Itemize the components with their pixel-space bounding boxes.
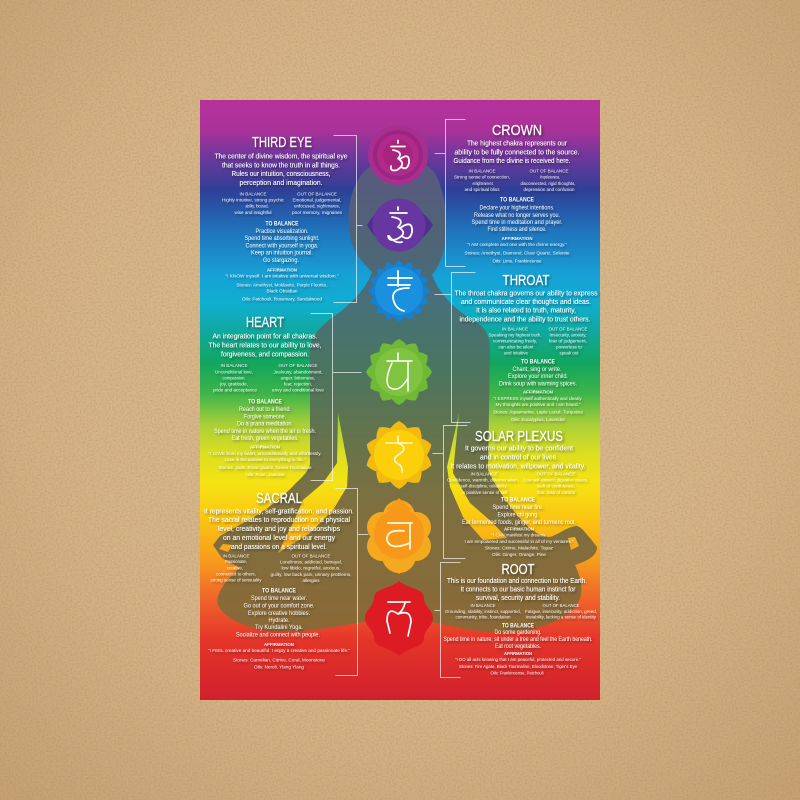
out of balance: throat <box>548 327 588 357</box>
in balance: crown: and spiritual bliss <box>464 187 500 193</box>
affirmation: solar plexus: I am empowered and successful in all of my ventures." <box>464 539 574 545</box>
affirmation: throat: Stones: Aquamarine, Lapis Lazuli, Turquoise <box>493 410 583 416</box>
to balance: solar plexus: Eat fermented foods, ginger, and turmeric root. <box>462 519 576 526</box>
out of balance: sacral: allergies <box>302 578 320 584</box>
chakra: sacral <box>367 498 431 574</box>
to balance: sacral: Explore creative hobbies. <box>248 610 310 617</box>
affirmation: third eye: "I KNOW myself. I am intuitive with universal wisdom." <box>226 274 339 280</box>
description: third eye <box>214 152 348 187</box>
out of balance: crown: OUT OF BALANCE <box>530 169 569 175</box>
description: sacral: level, creativity and joy and relationships <box>218 524 340 533</box>
out of balance: third eye: Emotional, judgemental, <box>292 198 342 204</box>
in balance: root: IN BALANCE <box>470 603 496 609</box>
out of balance: heart: envy and conditional love <box>272 387 324 393</box>
description: sacral: It represents vitality, self-gratification, and passion. <box>204 506 354 515</box>
affirmation: throat: AFFIRMATION <box>523 389 554 394</box>
out of balance: heart: fear, rejection, <box>284 381 312 387</box>
affirmation: crown: AFFIRMATION <box>502 236 533 241</box>
to balance: crown: Spend time in meditation and prayer. <box>472 219 563 226</box>
poster panel <box>200 100 600 700</box>
description: root <box>447 576 587 602</box>
in balance: heart <box>213 363 257 393</box>
in balance: sacral <box>210 554 262 584</box>
in balance: solar plexus: Confidence, warmth, determination, <box>447 478 519 484</box>
affirmation: crown: Stones: Amethyst, Diamond, Clear Quartz, Selenite <box>464 251 570 257</box>
description: crown: Guidance from the divine is received here. <box>454 156 570 165</box>
out of balance: third eye: OUT OF BALANCE <box>297 192 338 198</box>
to balance: throat <box>499 360 577 388</box>
out of balance: throat: powerless to <box>556 345 582 351</box>
affirmation: third eye: AFFIRMATION <box>267 268 298 273</box>
in balance: throat: Speaking my highest truth, <box>488 333 542 339</box>
icon: om syllable large <box>388 207 412 242</box>
to balance: crown <box>472 197 563 233</box>
to balance: solar plexus: Spend time near fire. <box>492 504 544 511</box>
panel: throat <box>454 272 598 423</box>
heading: third eye: THIRD EYE <box>252 134 312 151</box>
affirmation: heart: Stones: Jade, Rose Quartz, Green Tourmaline <box>218 465 312 471</box>
chakra: heart <box>366 339 432 405</box>
in balance: sacral: connected to others, <box>216 572 256 578</box>
chakra: crown <box>370 127 426 183</box>
icon: ram syllable <box>386 436 412 472</box>
out of balance: throat: Insecurity, anxiety, <box>550 333 586 339</box>
affirmation: heart: AFFIRMATION <box>250 445 281 450</box>
icon: ham syllable <box>388 271 412 311</box>
description: third eye: The center of divine wisdom, the spiritual eye <box>214 152 348 161</box>
description: heart: forgiveness, and compassion. <box>221 350 309 359</box>
description: third eye: perception and imagination. <box>240 178 322 187</box>
affirmation: throat <box>493 389 583 423</box>
to balance: throat: TO BALANCE <box>521 360 555 366</box>
in balance: sacral: Passionate, <box>225 559 247 565</box>
panel: heart <box>208 314 324 478</box>
description: crown <box>454 138 580 165</box>
out of balance: solar plexus: Low self-esteem, digestive issues, <box>524 478 588 484</box>
to balance: root <box>444 623 593 650</box>
to balance: heart: Do a prana meditation. <box>237 420 293 428</box>
affirmation: crown <box>464 236 570 264</box>
out of balance: solar plexus: OUT OF BALANCE <box>536 472 576 478</box>
description: throat: and communicate clear thoughts and ideas. <box>461 297 591 306</box>
out of balance: root: OUT OF BALANCE <box>542 603 580 609</box>
out of balance: solar plexus: lack of confidence, <box>537 484 575 490</box>
heading: heart: HEART <box>246 314 284 331</box>
panel: sacral <box>204 490 354 671</box>
panel: third eye <box>214 134 348 303</box>
in balance: third eye: wise and insightful <box>234 210 272 216</box>
to balance: root: TO BALANCE <box>502 623 534 629</box>
in balance: third eye: IN BALANCE <box>240 192 267 198</box>
in balance: crown: enlightenment, <box>472 181 494 187</box>
to balance: throat: Drink soup with warming spices. <box>499 380 577 388</box>
in balance: solar plexus: IN BALANCE <box>470 472 498 478</box>
description: heart: An integration point for all chakras. <box>212 332 318 341</box>
description: sacral: on an emotional level and our energy <box>223 533 335 542</box>
description: throat: independence and the ability to trust others. <box>460 314 590 323</box>
description: sacral <box>204 506 354 551</box>
heading: sacral: SACRAL <box>256 490 302 507</box>
description: root: This is our foundation and connection to the Earth. <box>447 576 587 585</box>
to balance: throat: Explore your inner child. <box>508 373 568 380</box>
in balance: throat: IN BALANCE <box>502 327 529 333</box>
affirmation: solar plexus: Stones: Citrine, Malachite, Topaz <box>485 546 554 552</box>
in balance: sacral: creative, <box>227 566 243 572</box>
out of balance: sacral: low libido, regretful, anxious, <box>282 566 340 572</box>
affirmation: third eye: Stones: Amethyst, Moldavite, Purple Fluorite, <box>236 283 328 289</box>
out of balance: crown: Hopelessness, <box>540 175 560 181</box>
to balance: sacral: Socialize and connect with people. <box>236 632 320 638</box>
heading: solar plexus: SOLAR PLEXUS <box>475 428 563 445</box>
panel: solar plexus <box>447 428 588 558</box>
to balance: sacral: Go out of your comfort zone. <box>244 602 315 610</box>
description: solar plexus: It relates to motivation, willpower, and vitality. <box>450 461 586 470</box>
in balance: throat <box>488 327 542 357</box>
to balance: sacral: Try Kundalini Yoga. <box>255 624 303 631</box>
description: throat: The throat chakra governs our ability to express <box>454 288 598 297</box>
affirmation: throat: "I EXPRESS myself authentically and clearly. <box>494 396 582 402</box>
to balance: sacral: Hydrate. <box>268 617 290 624</box>
out of balance: sacral <box>270 554 352 584</box>
chakra: solar plexus <box>363 421 435 489</box>
out of balance: crown: disconnected, rigid thoughts, <box>520 181 576 187</box>
to balance: throat: Chant, sing or write. <box>512 366 562 373</box>
to balance: solar plexus <box>462 498 576 526</box>
in balance: third eye <box>222 192 285 216</box>
description: throat <box>454 288 598 323</box>
to balance: third eye: Spend time absorbing sunlight. <box>244 235 320 242</box>
in balance: crown: IN BALANCE <box>468 169 496 175</box>
out of balance: third eye <box>292 192 343 216</box>
to balance: crown: TO BALANCE <box>500 197 534 203</box>
in balance: third eye: ability, focused, <box>246 204 268 210</box>
chakra: root <box>365 581 433 656</box>
affirmation: solar plexus <box>464 527 574 558</box>
in balance: heart: Unconditional love, <box>215 369 253 375</box>
description: heart: The heart relates to our ability to love, <box>208 341 322 350</box>
affirmation: heart: "I LOVE from my heart, unconditionally and effortlessly. <box>208 451 322 457</box>
out of balance: root: Fatigue, insecurity, addiction, greed, <box>525 609 597 615</box>
to balance: crown: Declare your highest intentions. <box>480 204 555 212</box>
to balance: third eye <box>244 221 320 264</box>
to balance: sacral: TO BALANCE <box>262 588 296 594</box>
in balance: solar plexus <box>447 472 519 496</box>
out of balance: sacral: OUT OF BALANCE <box>292 554 331 560</box>
to balance: third eye: Go stargazing. <box>263 257 299 264</box>
in balance: crown: Strong sense of connection, <box>454 175 510 181</box>
affirmation: sacral <box>208 642 350 671</box>
to balance: root: Spend time in nature; sit under a tree and feel the Earth beneath. <box>444 636 593 643</box>
in balance: root: community, tribe, foundation <box>456 614 511 620</box>
in balance: solar plexus: a positive sense of self <box>462 490 508 496</box>
out of balance: heart: OUT OF BALANCE <box>278 363 318 369</box>
to balance: third eye: TO BALANCE <box>266 221 298 227</box>
affirmation: root <box>455 651 581 676</box>
in balance: root: Grounding, stability, instinct, supported, <box>445 609 521 615</box>
description: crown: The highest chakra represents our <box>467 138 567 147</box>
affirmation: third eye <box>226 268 339 303</box>
to balance: root: Eat root vegetables. <box>495 643 541 650</box>
in balance: heart: compassion, <box>222 375 246 381</box>
to balance: heart <box>214 399 316 442</box>
to balance: heart: TO BALANCE <box>248 399 282 405</box>
out of balance: crown: depression and confusion <box>524 187 575 193</box>
in balance: solar plexus: self-discipline, reliability, <box>460 484 508 490</box>
affirmation: sacral: AFFIRMATION <box>264 642 295 647</box>
heading: throat: THROAT <box>502 272 550 289</box>
description: sacral: The sacral relates to reproduction on a physical <box>208 515 350 524</box>
out of balance: throat: fear of judgement, <box>549 339 587 345</box>
affirmation: sacral: "I FEEL creative and beautiful. I enjoy a creative and passionate life." <box>208 648 350 654</box>
description: solar plexus <box>450 444 586 470</box>
to balance: solar plexus: TO BALANCE <box>501 498 535 504</box>
panel: root <box>444 561 597 676</box>
affirmation: root: Oils: Frankincense, Patchouli <box>490 670 544 676</box>
in balance: heart: IN BALANCE <box>220 363 248 369</box>
icon: lam syllable <box>387 602 411 636</box>
affirmation: heart <box>208 445 322 478</box>
affirmation: crown: "I AM complete and one with the divine energy." <box>467 242 567 248</box>
connector brackets <box>310 120 476 678</box>
to balance: root: Do some gardening. <box>494 629 542 636</box>
in balance: root <box>445 603 521 620</box>
affirmation: sacral: Stones: Carnelian, Citrine, Coral, Moonstone <box>233 658 325 664</box>
description: third eye: Rules our intuition, consciousness, <box>232 169 330 178</box>
affirmation: solar plexus: Oils: Ginger, Orange, Pine <box>492 552 546 558</box>
in balance: heart: joy, gratitude, <box>219 381 248 387</box>
affirmation: crown: Oils: Lime, Frankincense <box>492 258 542 264</box>
to balance: heart: Eat fresh, green vegetables. <box>232 435 299 442</box>
description: root: survival, security and stability. <box>476 593 560 602</box>
description: throat: It is also related to truth, maturity, <box>476 306 576 315</box>
affirmation: root: Stones: Fire Agate, Black Tourmaline, Bloodstone, Tiger's Eye <box>459 664 577 670</box>
out of balance: throat: speak out <box>560 351 579 357</box>
to balance: crown: Find stillness and silence. <box>488 226 547 233</box>
out of balance: heart: Jealousy, abandonment, <box>274 369 322 375</box>
out of balance: crown <box>520 169 576 193</box>
affirmation: heart: Love is the answer to everything in life." <box>224 457 306 463</box>
to balance: third eye: Keep an intuition journal. <box>251 250 313 256</box>
description: solar plexus: and in control of our lives. <box>480 453 558 462</box>
to balance: heart: Forgive someone. <box>244 414 286 420</box>
icon: om syllable <box>391 140 409 170</box>
affirmation: third eye: Oils: Patchouli, Rosemary, Sandalwood <box>242 297 322 303</box>
in balance: throat: can also be silent <box>498 345 534 351</box>
affirmation: solar plexus: "I CAN manifest my dreams. <box>492 533 546 539</box>
text layer <box>204 122 598 676</box>
to balance: sacral <box>236 588 320 638</box>
in balance: throat: communicating freely, <box>493 339 537 345</box>
to balance: sacral: Spend time near water. <box>251 595 307 602</box>
description: solar plexus: It governs our ability to be confident <box>465 444 574 453</box>
description: sacral: and passions on a spiritual level. <box>231 542 327 551</box>
out of balance: heart: anger, bitterness, <box>281 375 315 381</box>
out of balance: third eye: unfocused, nightmares, <box>294 204 340 210</box>
out of balance: third eye: poor memory, migraines <box>292 210 343 216</box>
affirmation: throat: My thoughts are positive and I am heard." <box>496 402 581 408</box>
description: crown: ability to be fully connected to the source. <box>454 147 580 156</box>
meditating figure silhouette <box>213 160 597 633</box>
description: root: It connects to our basic human instinct for <box>460 584 576 593</box>
in balance: heart: pride and acceptance <box>213 387 257 393</box>
in balance: third eye: Highly intuitive, strong psychic <box>222 198 285 204</box>
affirmation: heart: Oils: Rose, Jasmine <box>246 472 285 478</box>
out of balance: solar plexus: fear, loss of control <box>537 490 575 496</box>
in balance: crown <box>454 169 510 193</box>
icon: vam syllable <box>387 523 412 549</box>
to balance: heart: Spend time in nature when the air is fresh. <box>214 428 316 435</box>
to balance: third eye: Connect with yourself in yoga. <box>246 242 319 250</box>
icon: yam syllable <box>387 353 412 391</box>
affirmation: root: "I DO all acts knowing that I am peaceful, protected and secure." <box>455 657 581 663</box>
out of balance: throat: OUT OF BALANCE <box>548 327 588 333</box>
panel: crown <box>454 122 580 264</box>
affirmation: throat: Oils: Eucalyptus, Lavender <box>511 417 565 423</box>
out of balance: sacral: guilty, low back pain, urinary problems, <box>270 572 352 578</box>
to balance: heart: Reach out to a friend. <box>239 406 291 413</box>
out of balance: root <box>525 603 597 620</box>
out of balance: solar plexus <box>524 472 588 496</box>
chakra: third eye <box>367 198 433 252</box>
to balance: third eye: Practice visualization. <box>256 228 309 235</box>
heading: crown: CROWN <box>492 122 542 139</box>
in balance: throat: and intuitive <box>504 351 528 357</box>
out of balance: root: instability, lacking a sense of identity <box>526 614 596 620</box>
in balance: sacral: IN BALANCE <box>222 554 250 560</box>
chakra: throat <box>368 260 430 322</box>
affirmation: third eye: Black Obsidian <box>266 289 298 295</box>
to balance: crown: Release what no longer serves you. <box>474 212 560 219</box>
to balance: solar plexus: Explore chi gong. <box>498 512 539 518</box>
heading: root: ROOT <box>502 561 534 578</box>
affirmation: sacral: Oils: Neroli, Ylang Ylang <box>254 665 304 671</box>
description: third eye: that seeks to know the truth in all things. <box>222 160 340 169</box>
affirmation: root: AFFIRMATION <box>504 651 533 656</box>
out of balance: sacral: Loneliness, addicted, betrayal, <box>280 560 342 566</box>
in balance: sacral: strong sense of sensuality <box>210 578 262 584</box>
affirmation: solar plexus: AFFIRMATION <box>504 527 535 532</box>
out of balance: heart <box>272 363 324 393</box>
description: heart <box>208 332 322 359</box>
